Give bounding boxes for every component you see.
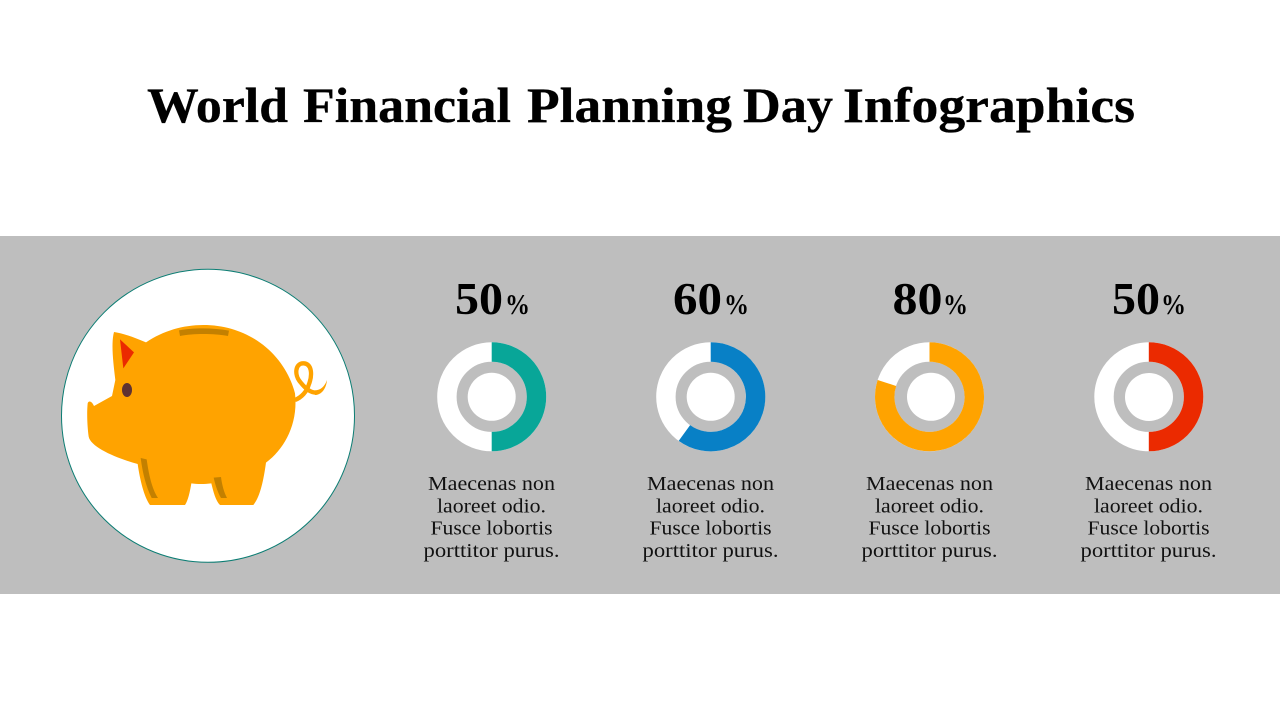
value: % [943, 290, 968, 321]
description: Maecenas non [647, 473, 774, 495]
pig body [87, 325, 296, 505]
description [862, 473, 998, 562]
description: Fusce lobortis [430, 518, 553, 540]
value [892, 274, 968, 324]
description: laoreet odio. [1094, 496, 1203, 518]
grey band panel [0, 236, 1280, 594]
metric 1: 50% teal [424, 274, 560, 562]
description: porttitor purus. [862, 540, 998, 562]
description [642, 473, 778, 562]
metric 3: 80% orange [862, 274, 998, 562]
rear leg shade [214, 477, 227, 498]
donut chart [447, 352, 536, 442]
description: Fusce lobortis [650, 518, 772, 540]
metric 2: 60% blue [642, 274, 778, 562]
description: laoreet odio. [875, 496, 984, 518]
value: 60 [673, 274, 722, 324]
icon: piggy bank in circle [62, 269, 354, 562]
description: Maecenas non [866, 473, 993, 495]
description: Maecenas non [1085, 473, 1212, 495]
donut chart [1104, 352, 1194, 442]
title: Financial [303, 77, 511, 133]
description: laoreet odio. [437, 496, 546, 518]
description: Fusce lobortis [1088, 518, 1210, 540]
description: Maecenas non [428, 473, 555, 495]
metric 4: 50% red [1080, 274, 1216, 562]
description: porttitor purus. [424, 540, 560, 562]
value [673, 274, 749, 324]
description [424, 473, 560, 562]
title: Day [743, 77, 833, 133]
donut chart [885, 352, 974, 442]
description: laoreet odio. [656, 496, 765, 518]
coin slot [179, 328, 229, 336]
pig tail [295, 363, 327, 400]
front leg shade [141, 458, 158, 498]
value [455, 274, 530, 324]
description: Fusce lobortis [868, 518, 991, 540]
donut chart [666, 352, 756, 442]
value: 50 [1112, 274, 1160, 324]
value: 80 [892, 274, 942, 324]
title: Planning [527, 77, 732, 133]
pig ear [120, 339, 134, 368]
value: % [505, 290, 530, 321]
description: porttitor purus. [642, 540, 778, 562]
value: % [1161, 290, 1186, 321]
value [1112, 274, 1186, 324]
description [1080, 473, 1216, 562]
value: 50 [455, 274, 503, 324]
description: porttitor purus. [1080, 540, 1216, 562]
title [147, 77, 1135, 133]
title: Infographics [843, 77, 1135, 133]
title: World [147, 77, 288, 133]
value: % [724, 290, 749, 321]
pig eye [122, 383, 132, 397]
